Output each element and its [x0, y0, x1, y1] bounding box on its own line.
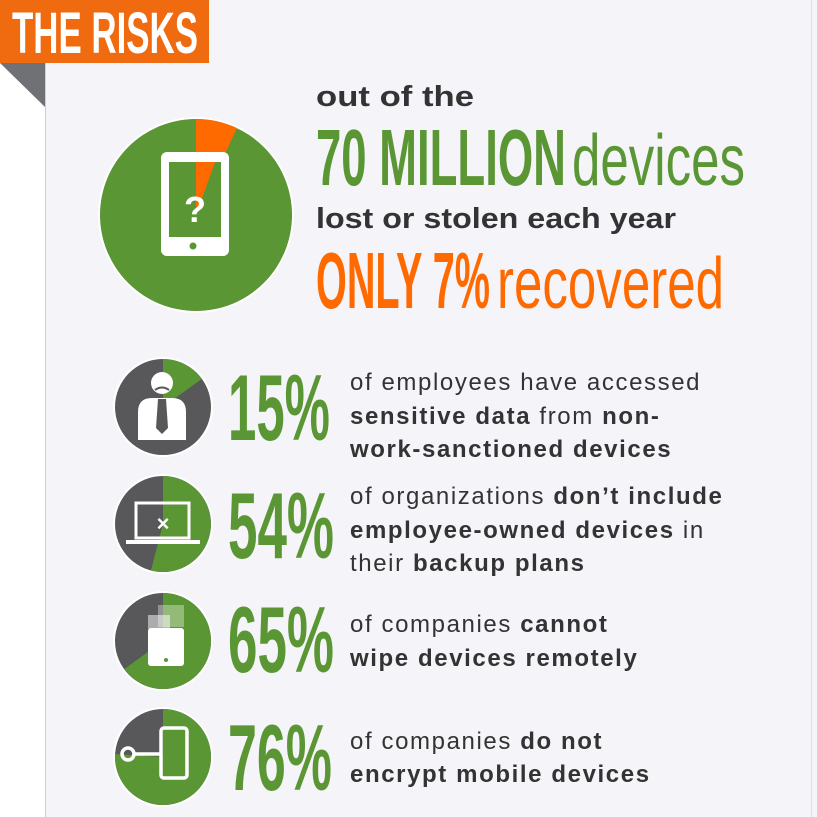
stat: 76%: 76% [228, 705, 332, 810]
stat: 54%: 54% [228, 473, 334, 578]
stat: 65%: 65% [228, 587, 334, 692]
stat: 65%: of companies cannot [350, 611, 608, 638]
icon: phone question [161, 152, 229, 256]
banner: title [0, 0, 209, 107]
stat: 15% [113, 355, 709, 463]
text block: headline: recovered [497, 244, 724, 324]
text block: headline [316, 81, 745, 325]
chart: big pie with phone [98, 117, 294, 313]
stat: 76%: encrypt mobile devices [350, 761, 651, 788]
stat: 54%: of organizations don’t include [350, 483, 723, 510]
icon: fading tablet [148, 605, 184, 666]
stat: 54% [113, 473, 732, 578]
stat: 65%: wipe devices remotely [349, 645, 638, 672]
stat: 76% [113, 705, 651, 810]
stat: 15%: 15% [228, 355, 330, 460]
stat: 54%: employee-owned devices in [350, 517, 705, 544]
icon: laptop [126, 503, 200, 544]
stat: 15%: of employees have accessed [350, 369, 701, 396]
stat: 15%: work-sanctioned devices [349, 436, 672, 463]
stat: 54%: their backup plans [350, 550, 586, 577]
icon: laptop: × [157, 511, 169, 536]
icon: phone question: ? [184, 189, 206, 230]
icon: key and phone [122, 728, 187, 778]
text block: headline: out of the [316, 81, 474, 113]
stat: 15%: sensitive data from non- [350, 403, 660, 430]
banner: title: THE RISKS [12, 1, 198, 66]
stat: 76%: of companies do not [350, 728, 603, 755]
text block: headline: ONLY 7% [316, 236, 490, 325]
text block: headline: devices [572, 121, 745, 201]
text block: headline: 70 MILLION [316, 113, 566, 202]
icon: employee [138, 372, 186, 440]
stat: 65% [113, 587, 638, 692]
text block: headline: lost or stolen each year [316, 203, 676, 235]
